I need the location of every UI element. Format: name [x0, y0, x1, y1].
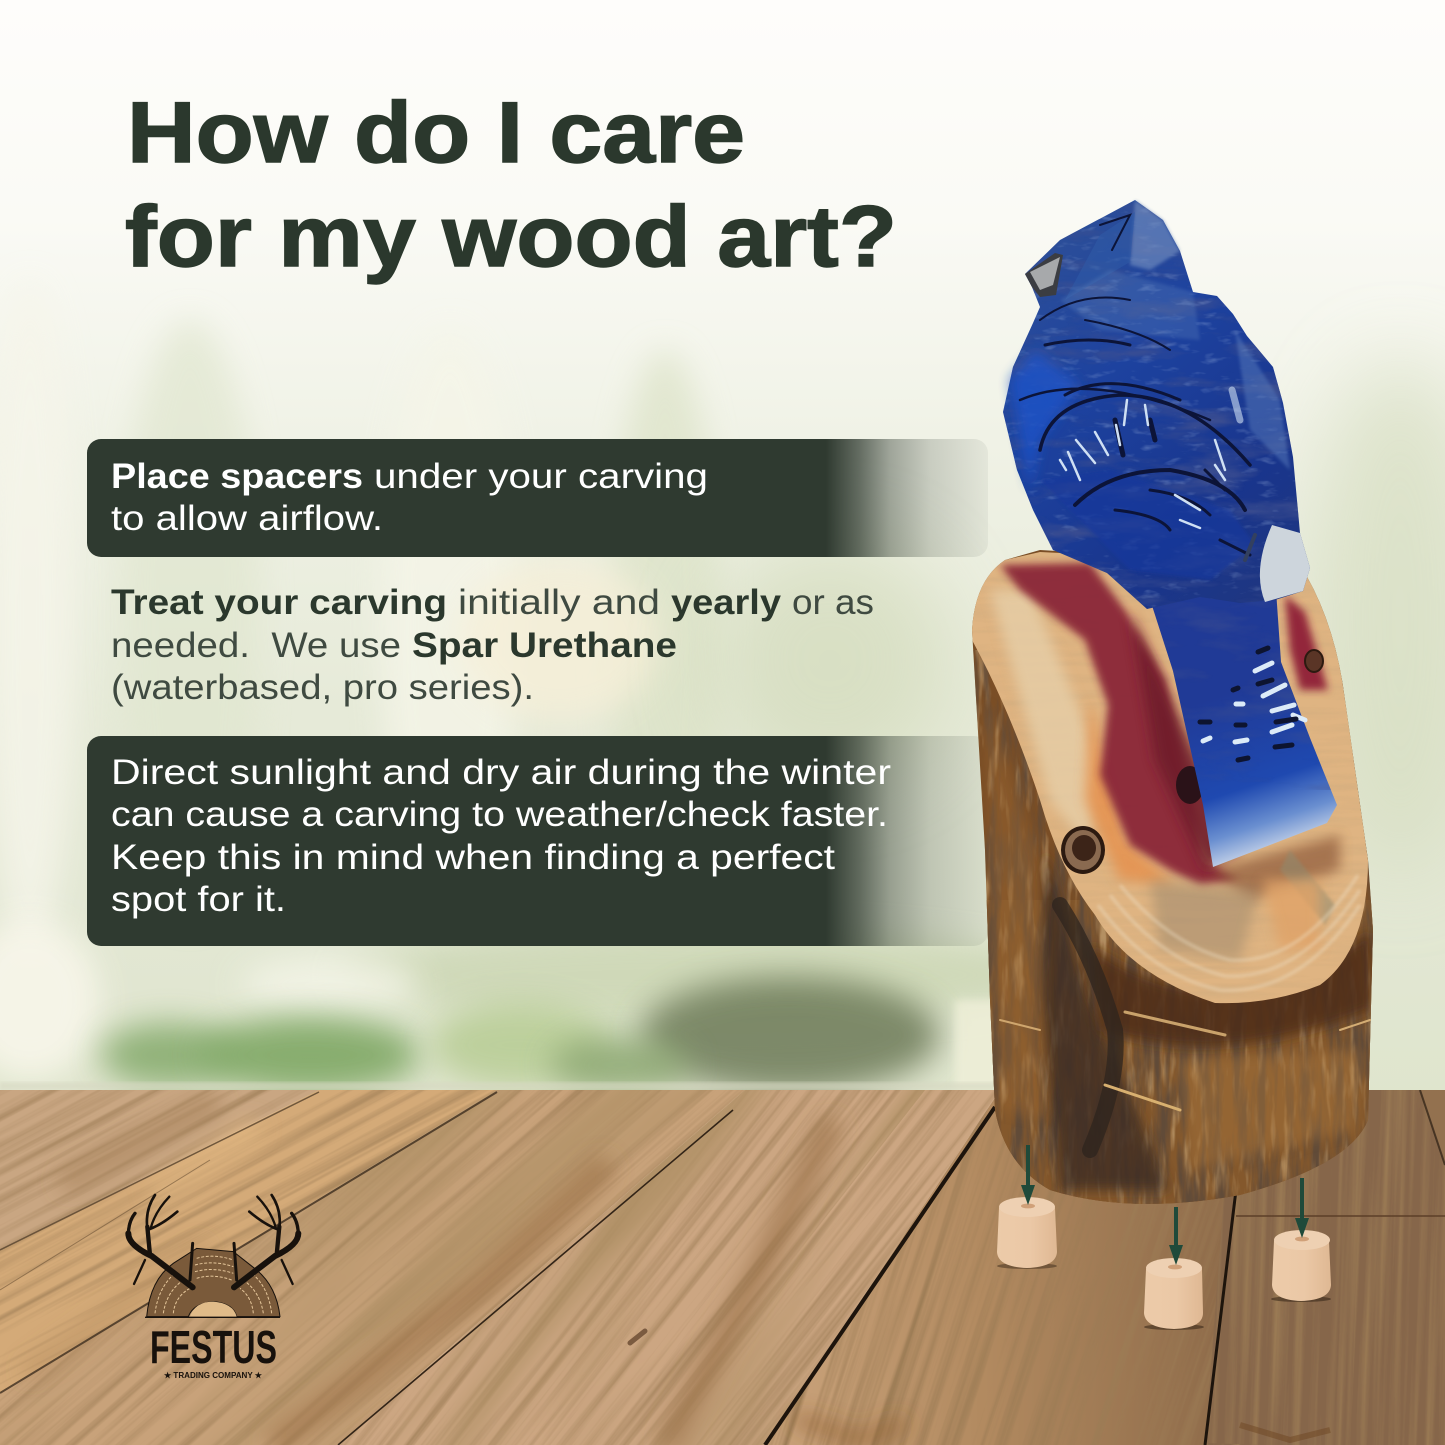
text block: treatment tip: (waterbased, pro series).	[111, 668, 534, 707]
panel: spacers tip	[87, 439, 988, 557]
title	[125, 85, 897, 285]
title: How do I care	[127, 85, 745, 181]
logo: tagline: ★ TRADING COMPANY ★	[164, 1371, 263, 1380]
panel: spacers tip: under your carving	[374, 457, 708, 496]
panel: spacers tip: Place spacers	[111, 457, 363, 496]
beak	[1025, 253, 1063, 297]
panel: sunlight tip: spot for it.	[111, 880, 286, 919]
arrow: left spacer	[1021, 1145, 1035, 1205]
spacer: centre	[1144, 1258, 1204, 1330]
tail bars	[1200, 648, 1305, 760]
text block: treatment tip: Spar Urethane	[412, 626, 677, 665]
panel: spacers tip: to allow airflow.	[111, 499, 383, 538]
panel: sunlight tip: can cause a carving to weather/check faster.	[111, 795, 888, 834]
plank: centre	[338, 1090, 1000, 1445]
arrow: centre spacer	[1169, 1207, 1183, 1265]
tail	[1147, 590, 1337, 867]
body highlight	[1010, 350, 1080, 490]
plank: lower right	[765, 1090, 1240, 1445]
floor stain bands	[30, 1105, 900, 1440]
logo: Festus Trading Company	[128, 1195, 298, 1380]
text block: treatment tip: Treat your carving	[111, 583, 447, 622]
arrow: right spacer	[1295, 1178, 1309, 1238]
title: for my wood art?	[125, 189, 897, 285]
background: blurred garden	[0, 0, 1445, 1095]
text block: treatment tip: initially and	[458, 583, 660, 622]
plank: centre left	[0, 1090, 745, 1445]
spacer: right	[1271, 1230, 1331, 1302]
panel: sunlight tip: Direct sunlight and dry air during the winter	[111, 753, 891, 792]
plank: far left	[0, 1090, 319, 1250]
spacer: left	[997, 1197, 1057, 1269]
wooden floor	[0, 1090, 1445, 1445]
plank: sandy	[0, 1090, 497, 1393]
sawn face	[972, 552, 1368, 1004]
logo: stump and antlers	[128, 1195, 298, 1317]
text block: treatment tip	[111, 583, 874, 707]
white wing streaks	[1060, 390, 1240, 528]
bark	[972, 550, 1373, 1204]
dark gouge	[1176, 766, 1204, 804]
head facets	[1130, 200, 1180, 270]
plank: far right	[1205, 1090, 1445, 1445]
bird carving	[1000, 195, 1340, 867]
text block: treatment tip: or as	[792, 583, 874, 622]
carved cuts	[1020, 215, 1255, 560]
log stump	[972, 550, 1373, 1204]
text block: treatment tip: needed. We use	[111, 626, 401, 665]
panel: sunlight tip: Keep this in mind when finding a perfect	[111, 838, 835, 877]
panel: sunlight tip	[87, 736, 988, 946]
body	[1003, 200, 1310, 609]
small knot	[1305, 650, 1323, 672]
text block: treatment tip: yearly	[671, 583, 782, 622]
plank: dark right top	[1421, 1090, 1445, 1154]
knot	[1061, 826, 1105, 874]
logo: wordmark: FESTUS	[150, 1321, 277, 1373]
wing tip	[1260, 525, 1310, 602]
